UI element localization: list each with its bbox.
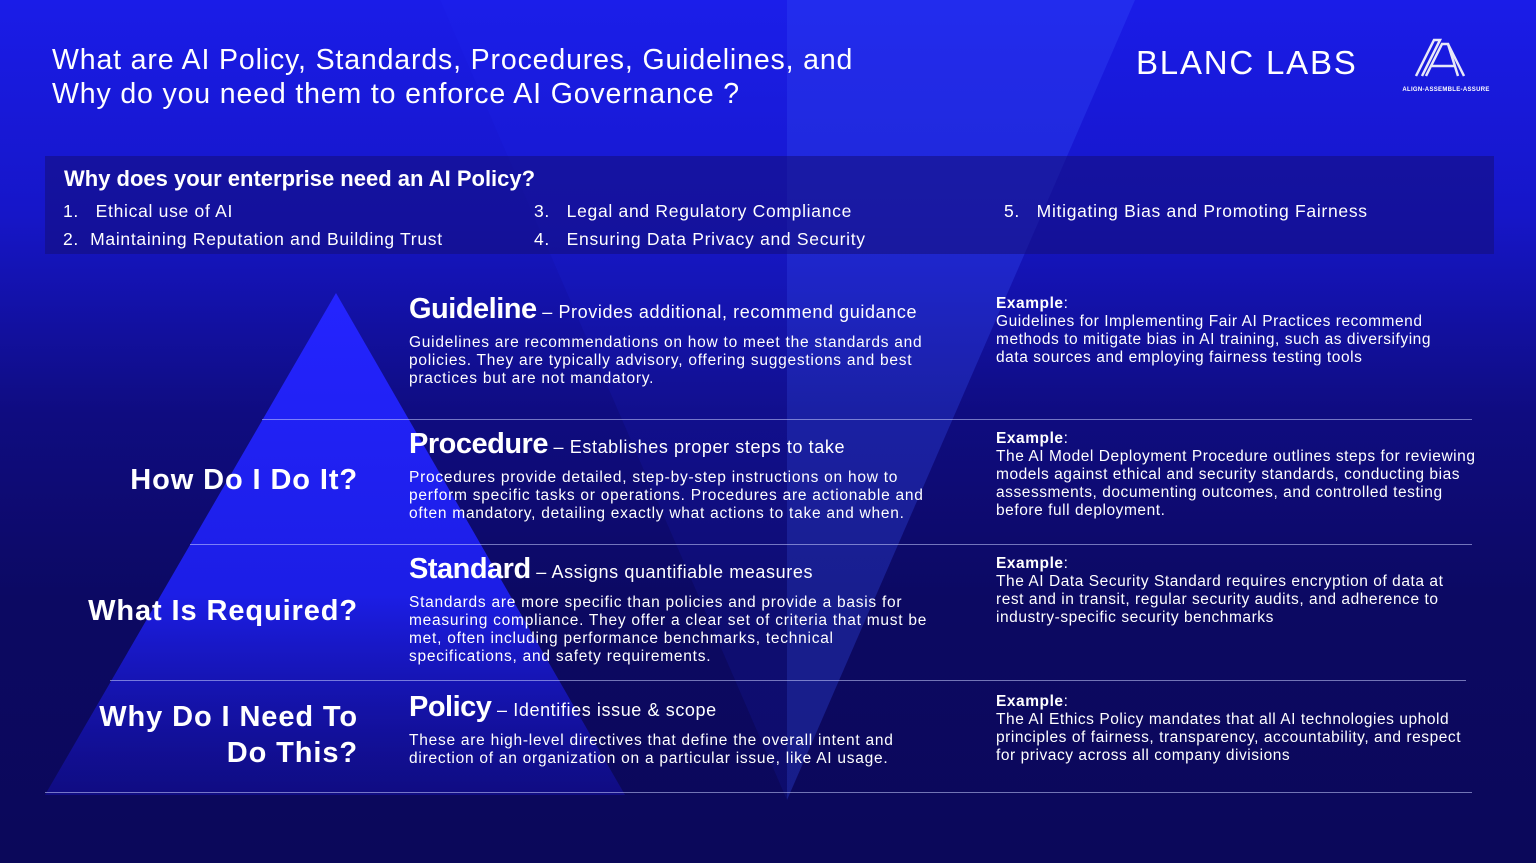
question: why: Do This? <box>227 737 358 769</box>
policy block: These are high-level directives that define the overall intent and <box>409 732 894 749</box>
guideline block <box>409 293 922 387</box>
example: procedure: before full deployment. <box>996 502 1165 519</box>
panel: why need AI policy <box>45 156 1494 254</box>
example: standard: industry-specific security benchmarks <box>996 609 1274 626</box>
example: standard: rest and in transit, regular security audits, and adherence to <box>996 591 1438 608</box>
panel: why need AI policy: 3. Legal and Regulatory Compliance <box>534 201 852 221</box>
panel heading: Why does your enterprise need an AI Policy? <box>64 166 535 191</box>
logo: AA mark <box>1402 38 1490 93</box>
guideline block: policies. They are typically advisory, offering suggestions and best <box>409 352 912 369</box>
title <box>52 44 853 110</box>
example: policy: Example: <box>996 693 1068 710</box>
example: guideline: Example: <box>996 295 1068 312</box>
question: why: Why Do I Need To <box>99 701 358 733</box>
policy block: Policy – Identifies issue & scope <box>409 691 717 723</box>
example: procedure: assessments, documenting outcomes, and controlled testing <box>996 484 1443 501</box>
standard block: measuring compliance. They offer a clear set of criteria that must be <box>409 612 927 629</box>
procedure block: Procedures provide detailed, step-by-step instructions on how to <box>409 469 898 486</box>
standard block: Standard – Assigns quantifiable measures <box>409 553 813 585</box>
list items: 1. Ethical use of AI <box>63 201 233 221</box>
list items <box>63 201 443 249</box>
policy block: direction of an organization on a particular issue, like AI usage. <box>409 750 888 767</box>
procedure block: Procedure – Establishes proper steps to take <box>409 428 845 460</box>
standard block: met, often including performance benchmarks, technical <box>409 630 834 647</box>
guideline block: Guidelines are recommendations on how to meet the standards and <box>409 334 922 351</box>
example: policy: for privacy across all company divisions <box>996 747 1290 764</box>
example: guideline <box>996 295 1431 366</box>
example: guideline: methods to mitigate bias in AI training, such as diversifying <box>996 331 1431 348</box>
question: what: What Is Required? <box>88 595 358 627</box>
policy block <box>409 691 894 767</box>
example: procedure <box>996 430 1476 519</box>
example: standard <box>996 555 1443 626</box>
question: how: How Do I Do It? <box>130 464 358 496</box>
example: procedure: Example: <box>996 430 1068 447</box>
title: What are AI Policy, Standards, Procedures, Guidelines, and <box>52 44 853 76</box>
question: why <box>99 701 358 769</box>
example: policy: The AI Ethics Policy mandates that all AI technologies uphold <box>996 711 1449 728</box>
panel: why need AI policy: 5. Mitigating Bias and Promoting Fairness <box>1004 201 1368 221</box>
procedure block: perform specific tasks or operations. Procedures are actionable and <box>409 487 924 504</box>
panel: why need AI policy: 4. Ensuring Data Privacy and Security <box>534 229 866 249</box>
standard block: Standards are more specific than policies and provide a basis for <box>409 594 902 611</box>
guideline block: practices but are not mandatory. <box>409 370 654 387</box>
title: Why do you need them to enforce AI Governance ? <box>52 78 740 110</box>
example: guideline: Guidelines for Implementing Fair AI Practices recommend <box>996 313 1423 330</box>
logo: AA mark: ALIGN-ASSEMBLE-ASSURE <box>1402 87 1490 93</box>
list items: 2. Maintaining Reputation and Building Trust <box>63 229 443 249</box>
logo: BLANC LABS: BLANC LABS <box>1136 44 1358 81</box>
example: procedure: models against ethical and security standards, conducting bias <box>996 466 1460 483</box>
standard block: specifications, and safety requirements. <box>409 648 711 665</box>
example: policy: principles of fairness, transparency, accountability, and respect <box>996 729 1461 746</box>
standard block <box>409 553 927 665</box>
example: guideline: data sources and employing fairness testing tools <box>996 349 1362 366</box>
example: standard: The AI Data Security Standard requires encryption of data at <box>996 573 1443 590</box>
example: policy <box>996 693 1461 764</box>
procedure block <box>409 428 924 522</box>
procedure block: often mandatory, detailing exactly what actions to take and when. <box>409 505 905 522</box>
example: procedure: The AI Model Deployment Procedure outlines steps for reviewing <box>996 448 1476 465</box>
guideline block: Guideline – Provides additional, recommend guidance <box>409 293 917 325</box>
example: standard: Example: <box>996 555 1068 572</box>
